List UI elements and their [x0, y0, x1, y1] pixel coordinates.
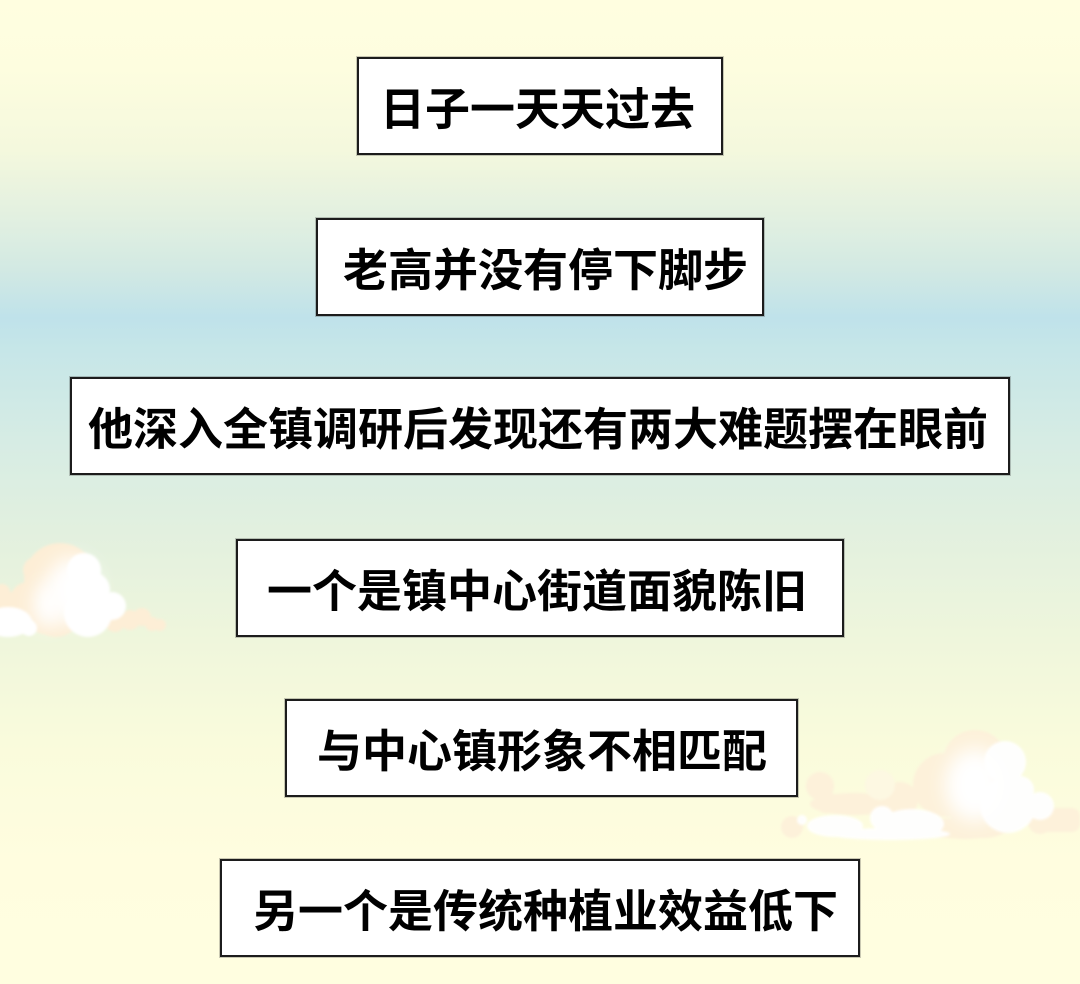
small pale cloud puff — [865, 770, 895, 800]
text box: line 4: 一个是镇中心街道面貌陈旧 — [267, 566, 807, 617]
text box: line 2 — [316, 218, 764, 316]
icon: left cloud — [0, 543, 166, 637]
text box: line 6 — [220, 859, 860, 957]
text box: line 1 — [357, 57, 723, 155]
text box: line 3: 他深入全镇调研后发现还有两大难题摆在眼前 — [88, 404, 988, 455]
text box: line 5: 与中心镇形象不相匹配 — [317, 726, 767, 777]
text box: line 1: 日子一天天过去 — [380, 84, 695, 135]
icon: right cloud — [781, 730, 1080, 840]
text box: line 5 — [285, 699, 798, 797]
text box: line 4 — [236, 539, 844, 637]
text box: line 2: 老高并没有停下脚步 — [343, 245, 748, 296]
text box: line 3 — [70, 377, 1010, 475]
text box: line 6: 另一个是传统种植业效益低下 — [253, 886, 838, 937]
